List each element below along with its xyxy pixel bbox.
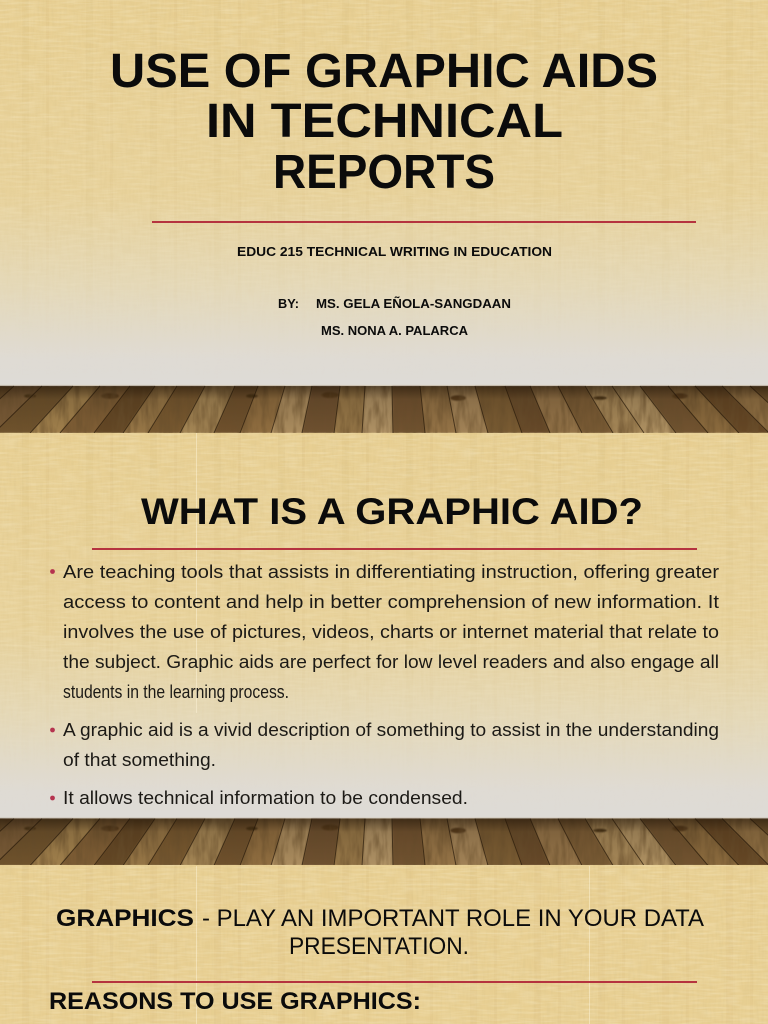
authors [278,296,511,338]
bullet 1: Are teaching tools that assists in differentiating instruction, offering greater [63,562,719,582]
heading: WHAT IS A GRAPHIC AID? [141,491,643,532]
authors: BY: [278,297,299,311]
bullet 2: A graphic aid is a vivid description of something to assist in the understanding [63,720,719,740]
subtitle: course: EDUC 215 TECHNICAL WRITING IN EDUCATION [237,245,552,259]
bullet list [50,562,719,808]
title: REPORTS [273,146,495,199]
bullet 2 [50,720,719,770]
bullet 1: students in the learning process. [63,682,289,702]
panel: title slide [0,0,768,433]
title: IN TECHNICAL [206,95,563,148]
title: USE OF GRAPHIC AIDS [110,45,658,98]
heading underline [92,548,697,550]
authors: MS. GELA EÑOLA-SANGDAAN [316,296,511,311]
panel: what is a graphic aid slide [0,433,768,866]
bullet 3: It allows technical information to be condensed. [63,788,468,808]
graphics statement: GRAPHICS [56,905,194,932]
panel: graphics slide [0,865,768,1024]
wooden floor band [0,386,768,433]
bullet 2: of that something. [63,750,216,770]
background: papyrus wall [0,865,768,1024]
background: papyrus wall [0,0,768,387]
background: papyrus wall [0,433,768,819]
bullet 1: the subject. Graphic aids are perfect for low level readers and also engage all [63,652,719,672]
divider line [92,981,697,983]
graphics statement: - PLAY AN IMPORTANT ROLE IN YOUR DATA [202,905,704,932]
authors: MS. NONA A. PALARCA [321,324,468,338]
bullet 1: involves the use of pictures, videos, charts or internet material that relate to [63,622,719,642]
reasons heading: REASONS TO USE GRAPHICS: [49,988,421,1015]
bullet 1: access to content and help in better comprehension of new information. It [63,592,719,612]
graphics statement: PRESENTATION. [289,933,469,960]
title underline [152,221,696,223]
graphics statement [56,905,704,960]
wooden floor band [0,818,768,866]
bullet 1 [50,562,719,702]
title [110,45,658,199]
